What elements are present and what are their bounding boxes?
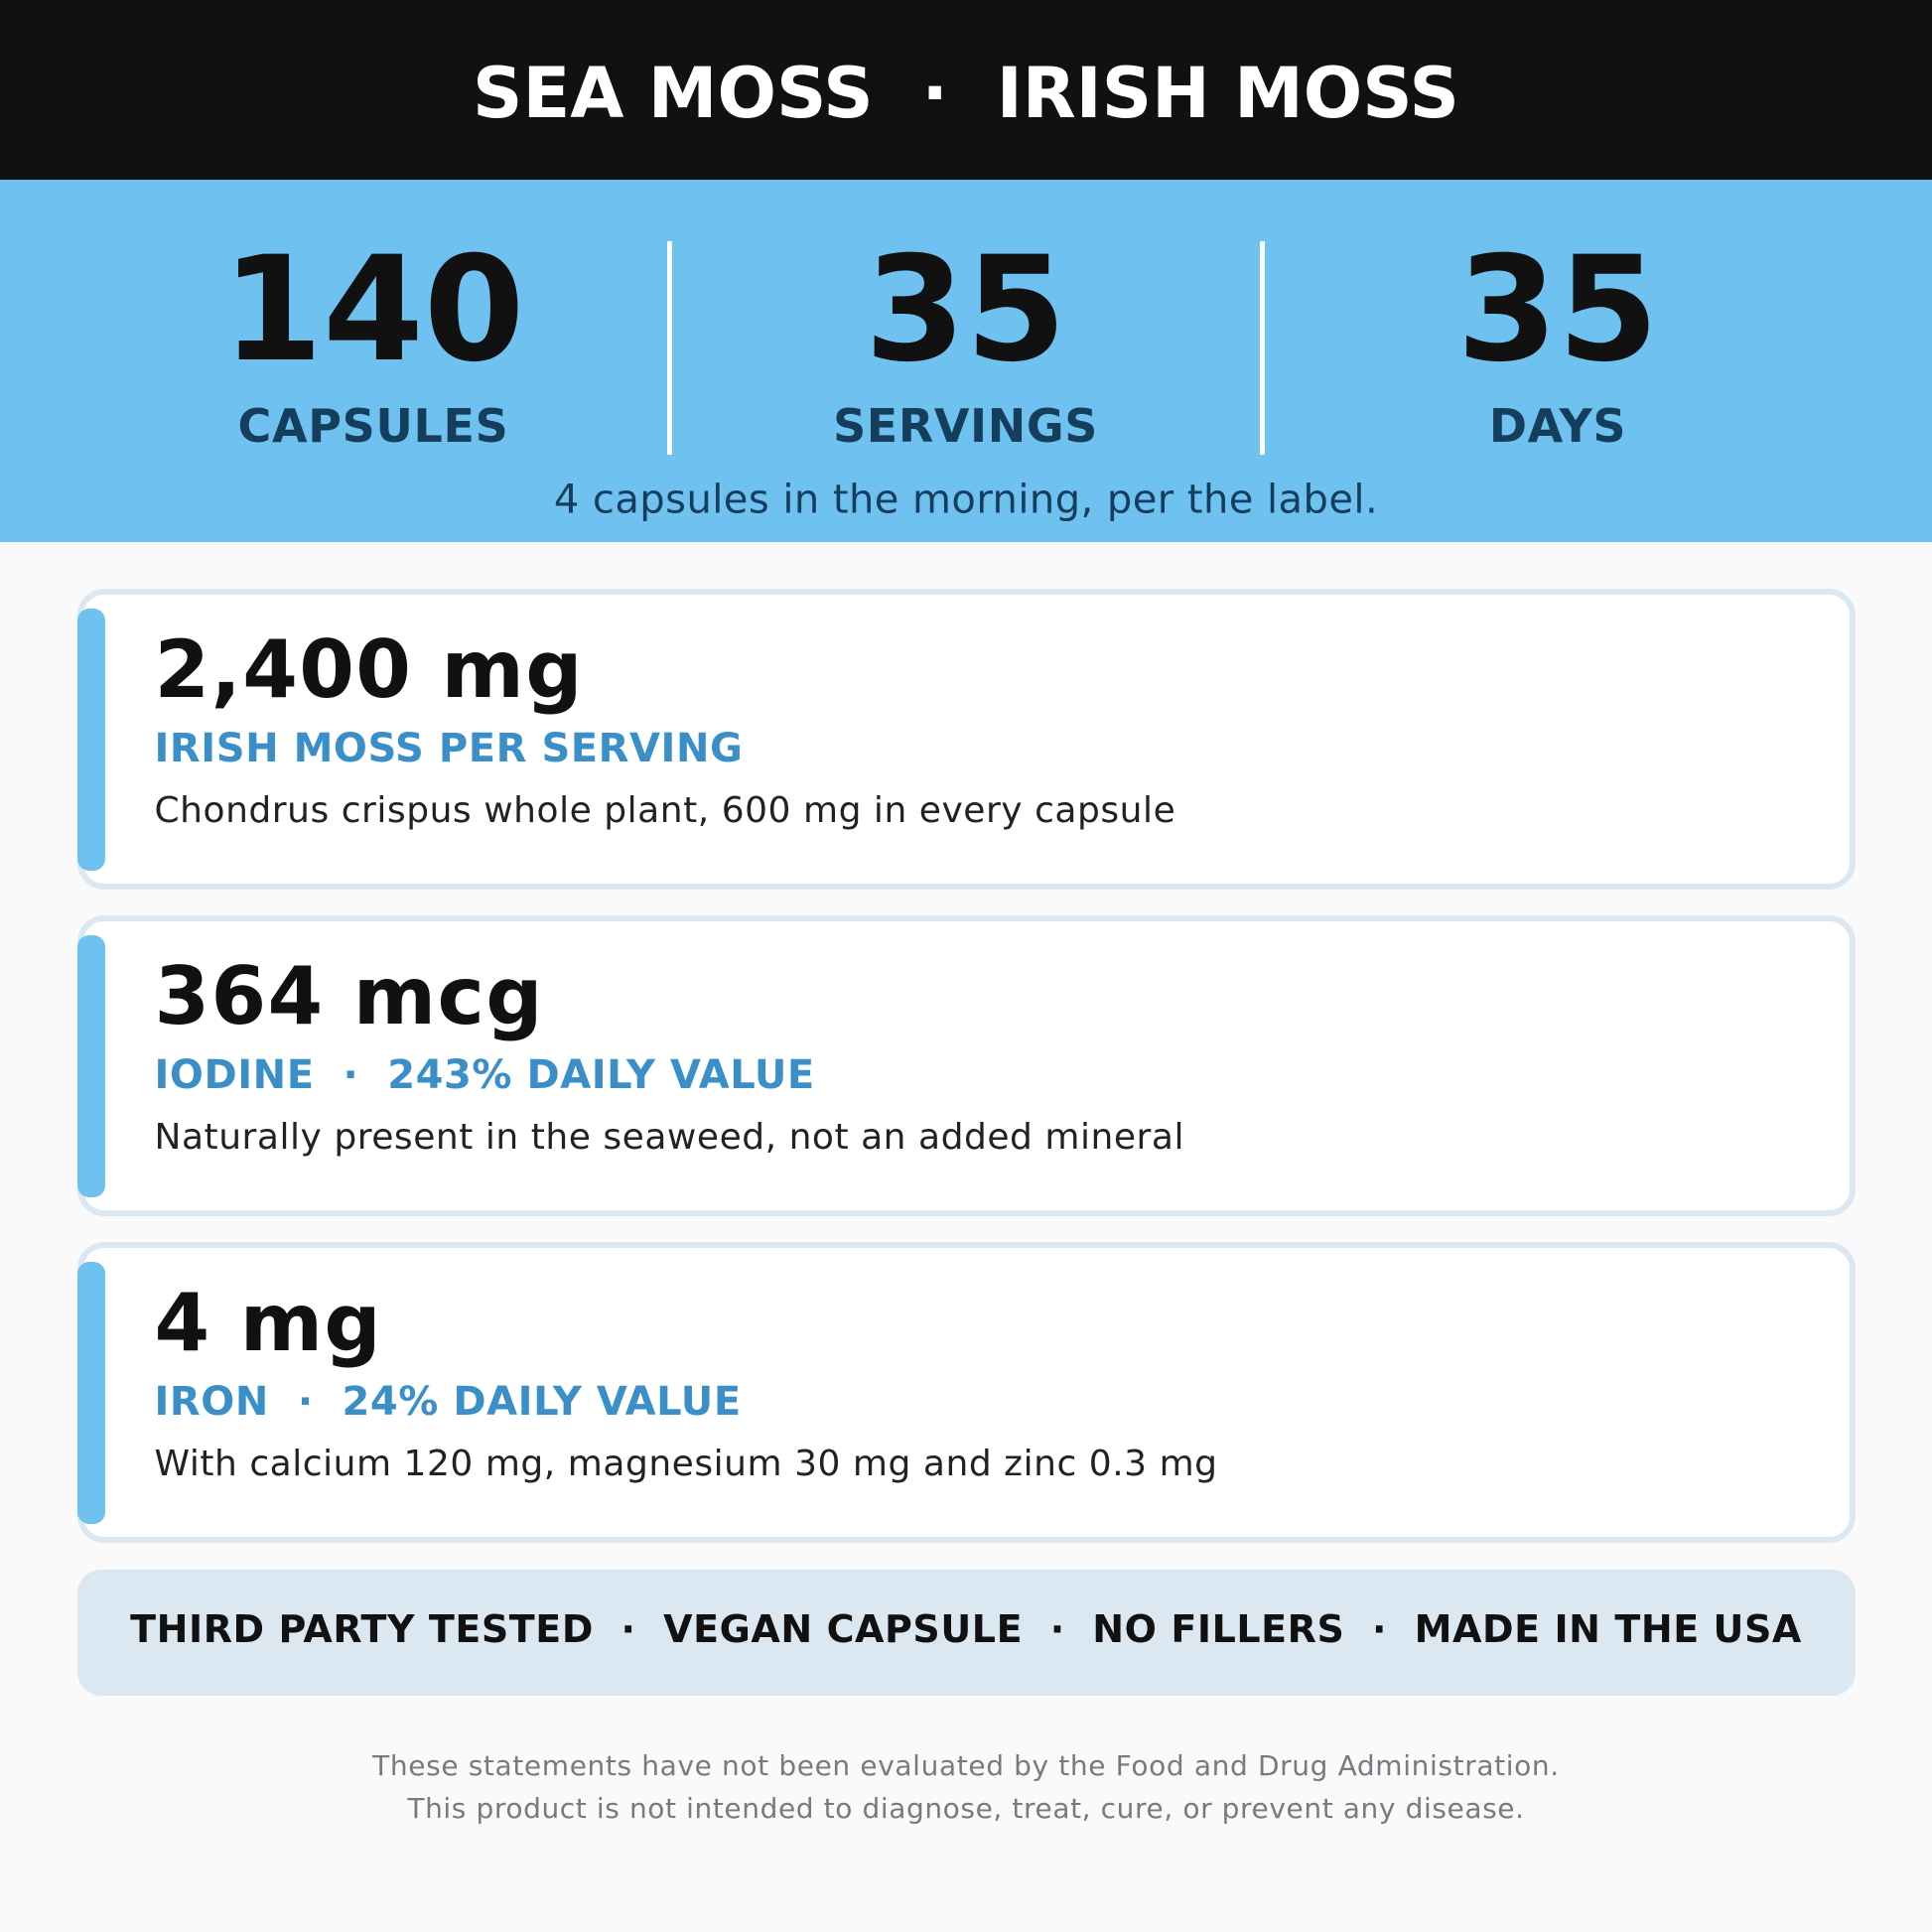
stat: capsules: 140	[222, 225, 524, 394]
stat: days: 35	[1456, 225, 1659, 394]
stat: days: DAYS	[1489, 399, 1626, 453]
badge strip	[77, 1570, 1856, 1696]
title: SEA MOSS · IRISH MOSS	[473, 53, 1459, 134]
dosage note: 4 capsules in the morning, per the label.	[554, 477, 1378, 522]
disclaimer	[371, 1749, 1560, 1825]
label: IRISH MOSS PER SERVING	[155, 726, 743, 771]
description: With calcium 120 mg, magnesium 30 mg and zinc 0.3 mg	[155, 1444, 1218, 1484]
badge strip: THIRD PARTY TESTED · VEGAN CAPSULE · NO FILLERS · MADE IN THE USA	[130, 1607, 1802, 1651]
panel: irish moss	[77, 592, 1853, 887]
header banner	[0, 0, 1932, 180]
stat: servings: SERVINGS	[833, 399, 1098, 453]
panel: iodine	[77, 918, 1853, 1213]
stats band	[0, 180, 1932, 542]
amount: 2,400 mg	[155, 623, 584, 716]
stat: capsules: CAPSULES	[237, 399, 509, 453]
amount: 364 mcg	[155, 950, 544, 1042]
amount: 4 mg	[155, 1277, 382, 1369]
label: IODINE · 243% DAILY VALUE	[155, 1052, 815, 1098]
disclaimer: This product is not intended to diagnose, treat, cure, or prevent any disease.	[406, 1792, 1525, 1825]
disclaimer: These statements have not been evaluated by the Food and Drug Administration.	[371, 1749, 1560, 1782]
description: Chondrus crispus whole plant, 600 mg in every capsule	[155, 790, 1175, 831]
stat: servings	[833, 225, 1098, 453]
label: IRON · 24% DAILY VALUE	[155, 1379, 742, 1425]
stat: servings: 35	[865, 225, 1066, 394]
panel: iron	[77, 1245, 1853, 1540]
description: Naturally present in the seaweed, not an added mineral	[155, 1117, 1184, 1158]
